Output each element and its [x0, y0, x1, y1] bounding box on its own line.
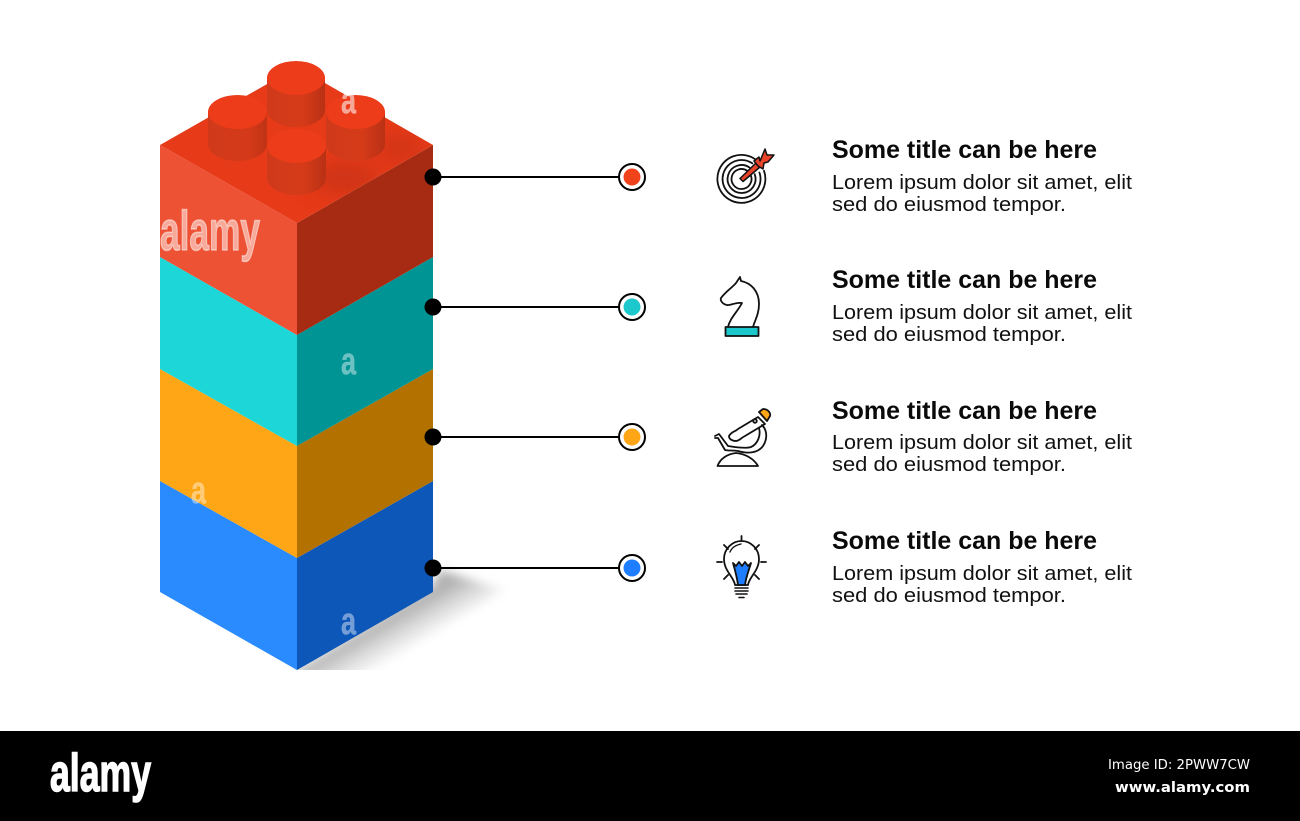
watermarks on tower: [160, 80, 357, 643]
text block 4: [832, 527, 1132, 607]
icon: light bulb: [717, 536, 766, 598]
ground shadow: [293, 566, 498, 670]
text block 1: Some title can be here: [832, 136, 1097, 164]
text block 1: Lorem ipsum dolor sit amet, elit: [832, 172, 1132, 194]
icon: microscope: [715, 409, 770, 466]
watermarks on tower: a: [341, 80, 357, 122]
connector: red: [424, 164, 645, 190]
text block 4: Lorem ipsum dolor sit amet, elit: [832, 563, 1132, 585]
layer: orange: [160, 369, 433, 558]
connector: blue: [424, 555, 645, 581]
watermarks on tower: a: [341, 601, 357, 643]
text block 2: [832, 266, 1132, 346]
text block 3: [832, 397, 1132, 476]
watermarks on tower: a: [341, 341, 357, 383]
text block 2: sed do eiusmod tempor.: [832, 324, 1066, 346]
text block 3: Some title can be here: [832, 397, 1097, 425]
brick tower: [160, 61, 505, 690]
website: www.alamy.com: [1115, 780, 1250, 796]
stud: front: [267, 129, 326, 195]
stud: back: [267, 61, 325, 127]
stud: right: [326, 95, 385, 161]
text block 4: Some title can be here: [832, 527, 1097, 555]
icon: chess knight: [721, 277, 759, 336]
connector: teal: [424, 294, 645, 320]
layer: teal: [160, 257, 433, 446]
footer logo: alamy: [50, 744, 151, 803]
watermarks on tower: a: [191, 470, 207, 512]
text block 3: sed do eiusmod tempor.: [832, 454, 1066, 476]
connector: orange: [424, 424, 645, 450]
footer bar: [0, 731, 1300, 821]
stud shadows: [311, 136, 424, 194]
icon: target with dart: [717, 149, 774, 203]
text block 2: Lorem ipsum dolor sit amet, elit: [832, 302, 1132, 324]
stud: left: [208, 95, 267, 161]
layer: blue: [160, 481, 433, 670]
text block 4: sed do eiusmod tempor.: [832, 585, 1066, 607]
text block 1: [832, 136, 1132, 216]
image id: Image ID: 2PWW7CW: [1108, 757, 1250, 773]
layer: red: [160, 67, 433, 335]
text block 3: Lorem ipsum dolor sit amet, elit: [832, 432, 1132, 454]
watermarks on tower: alamy: [160, 199, 260, 262]
text block 1: sed do eiusmod tempor.: [832, 194, 1066, 216]
text block 2: Some title can be here: [832, 266, 1097, 294]
